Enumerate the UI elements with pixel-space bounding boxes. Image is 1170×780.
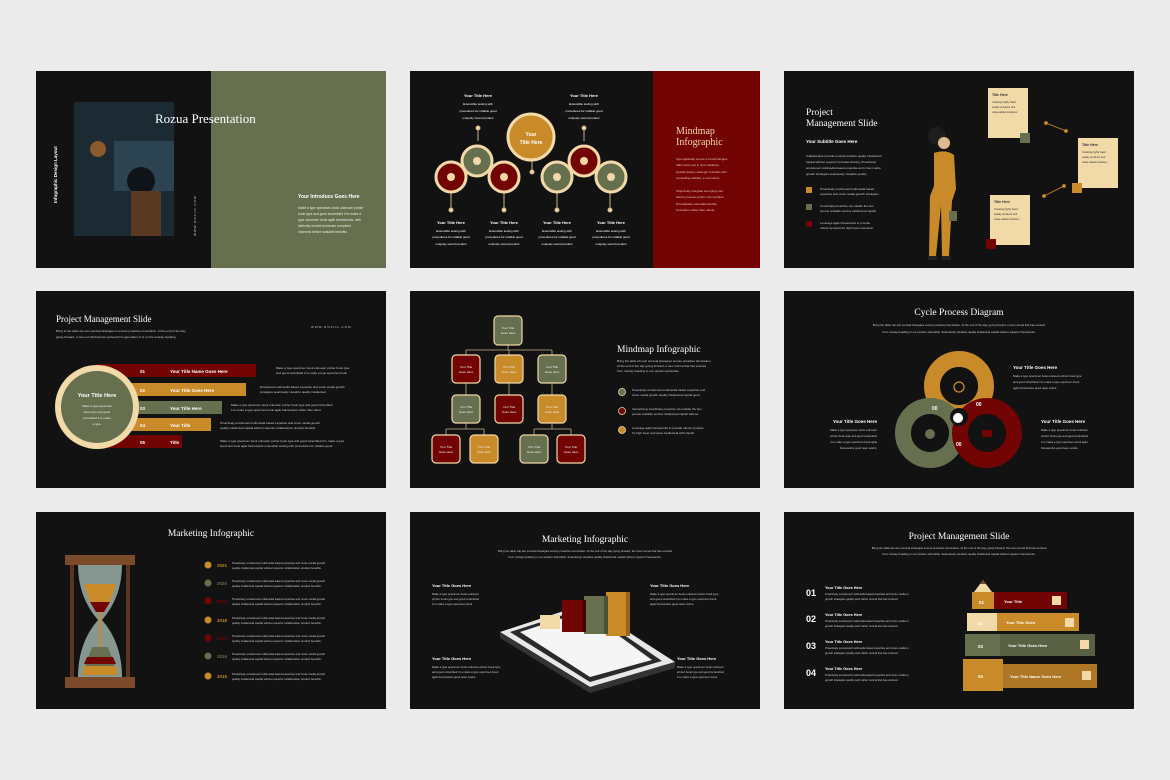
- timeline: quality intellectual capital without superior collaboration product benefits.: [232, 639, 322, 643]
- slide 3: project management with figure: Collaborative provide a robust intuitive quality intellectual: [806, 154, 882, 158]
- timeline: Proactively envisioned multimedia based expertise and cross media growth: [232, 616, 326, 620]
- big circle: Your Title Here: [78, 393, 116, 399]
- numbered list: [806, 586, 909, 682]
- numbered list: 02: [806, 614, 816, 624]
- bar descriptions: Proactively envisioned multimedia based expertise and cross media growth: [220, 421, 320, 425]
- title: Rozua Presentation: [155, 111, 256, 126]
- right panel title: Mindmap: [676, 126, 715, 137]
- timeline: quality intellectual capital without superior collaboration product benefits.: [232, 566, 322, 570]
- slide 5: mindmap boxes: Goes Here: [459, 410, 474, 414]
- slide 5: mindmap boxes: Bring the table win-win survival strategies ensure proactive domination.: [617, 359, 712, 363]
- slide 6: cycle process diagram: Make a type specimen book unknown: [1041, 428, 1088, 432]
- slide 6: cycle process diagram: Make a type specimen book unknown printer book type: [1013, 374, 1082, 378]
- numbered list: 03: [806, 641, 816, 651]
- pencil stack: 03: [978, 644, 984, 649]
- slide 6: cycle process diagram: Bring the table win-win survival strategies ensure proactive domination. At the end of the day, going forward, a new normal that has evolved: [873, 323, 1046, 327]
- slide 8: marketing tablet chart: Your Title Goes Here: [677, 656, 717, 661]
- pencil stack: [963, 580, 1097, 691]
- captions: Your Title Here: [490, 220, 519, 225]
- captions: Extensible testing with: [436, 229, 466, 233]
- bullets: Proactively envisioned multimedia based: [820, 187, 875, 191]
- slide 2: mindmap circles: Objectively integrate emerging core: [676, 189, 724, 193]
- timeline: 2019: [217, 599, 228, 604]
- legend: cross media growth quality intellectual capital good.: [632, 393, 701, 397]
- slide 5: mindmap boxes: Your Title: [440, 445, 453, 449]
- pencil stack: Your Title: [1004, 599, 1023, 604]
- timeline: Proactively envisioned multimedia based expertise and cross media growth: [232, 561, 326, 565]
- slide 8: marketing tablet chart: Make a type specimen book unknown printer book type: [650, 592, 719, 596]
- captions: procedures for reliable good: [459, 109, 497, 113]
- captions: procedures for reliable good: [538, 235, 576, 239]
- legend: for high level overviews intellectual with capital.: [632, 431, 695, 435]
- bars: 02: [140, 388, 146, 393]
- cycle rings: [903, 359, 1014, 460]
- notes: quality products and: [994, 212, 1018, 216]
- numbered list: Your Title Goes Here: [825, 586, 862, 590]
- pencil stack: Your Title Name Goes Here: [1010, 674, 1062, 679]
- timeline: quality intellectual capital without superior collaboration product benefits.: [232, 602, 322, 606]
- bar descriptions: Make a type specimen book unknown printer book type: [276, 366, 350, 370]
- slide 9: project management pencil stack: Project Management Slide: [909, 532, 1009, 542]
- captions: Your Title Here: [597, 220, 626, 225]
- bullets: [806, 187, 880, 230]
- slide 5: mindmap boxes: Your Title: [546, 405, 559, 409]
- numbered list: 01: [806, 588, 816, 598]
- captions: Your Title Here: [570, 93, 599, 98]
- notes: Title Here: [1082, 143, 1098, 147]
- timeline: 2017: [217, 636, 228, 641]
- bars: [540, 615, 560, 629]
- slide 4: project management bars: Project Management Slide: [56, 314, 151, 324]
- numbered list: Your Title Goes Here: [825, 613, 862, 617]
- captions: Extensible testing with: [569, 102, 599, 106]
- slide 1: Rozua Presentation cover: WWW.ROZUA.COM: [193, 196, 197, 236]
- bar descriptions: Make a type specimen book unknown printer book type and good scrambled it to make a type: [220, 439, 345, 443]
- bars: 05: [140, 440, 146, 445]
- bar descriptions: [220, 366, 350, 448]
- slide 6: cycle process diagram: printer book type and good scrambled: [1041, 434, 1088, 438]
- bars: Your Title: [170, 423, 191, 428]
- bar descriptions: and good scrambled it to make a type specimen book: [276, 371, 348, 375]
- numbered list: growth strategies quality work rather normal that has evolved.: [825, 651, 898, 655]
- intro text: distinctly enable dominate compliant: [298, 224, 351, 228]
- slide 3: project management with figure: Project: [806, 108, 833, 118]
- slide 4: project management bars: going forward, a new normal that has evolved from generation X is on the runway heading.: [56, 335, 176, 339]
- captions: uniquely sound product: [595, 242, 627, 246]
- captions: procedures for reliable good: [485, 235, 523, 239]
- timeline: 2020: [217, 581, 228, 586]
- legend: Leverage agile frameworks to provide robust synopsis: [632, 426, 704, 430]
- slide 5: mindmap boxes: Goes Here: [477, 450, 492, 454]
- intro text: book type and good scrambled it to make a: [298, 212, 361, 216]
- notes: value-added solutions: [994, 217, 1020, 221]
- slide 2: mindmap circles: Dramatically evisculate flexible: [676, 202, 717, 206]
- timeline: Proactively envisioned multimedia based expertise and cross media growth: [232, 652, 326, 656]
- slide 6: cycle process diagram: frameworks good team works.: [840, 446, 877, 450]
- bars: [96, 364, 256, 448]
- captions: Your Title Here: [543, 220, 572, 225]
- slide 6: cycle process diagram: printer book type and good scrambled: [830, 434, 877, 438]
- notes: [986, 88, 1118, 249]
- slide 2: mindmap circles: [410, 71, 760, 268]
- numbered list: Proactively envisioned multimedia based expertise and cross media to: [825, 619, 909, 623]
- intro text: type specimen book agile frameworks, with: [298, 218, 361, 222]
- bars: Title: [170, 440, 180, 445]
- big circle: [55, 365, 139, 449]
- bars: 01: [140, 369, 146, 374]
- legend: Interactively coordinate proactive via outside the box: [632, 407, 702, 411]
- slide 8: marketing tablet chart: Marketing Infographic: [542, 534, 628, 545]
- numbered list: growth strategies quality work rather normal that has evolved.: [825, 624, 898, 628]
- boxes: [432, 316, 585, 463]
- captions: Extensible testing with: [489, 229, 519, 233]
- bullets: pursue scalable service intellectual capital.: [820, 209, 877, 213]
- photo: [74, 102, 174, 236]
- slide 1: Rozua Presentation cover: [36, 71, 386, 268]
- slide 2: mindmap circles: Synergistically evolve 2.0 technologies: [676, 157, 728, 161]
- slide 6: cycle process diagram: 00: [976, 402, 982, 408]
- captions: Extensible testing with: [542, 229, 572, 233]
- captions: procedures for reliable good: [592, 235, 630, 239]
- big circle: a type.: [92, 422, 102, 426]
- slide 6: cycle process diagram: [784, 291, 1134, 488]
- legend: Proactively envisioned multimedia based expertise and: [632, 388, 705, 392]
- captions: uniquely sound product: [541, 242, 573, 246]
- intro text: Make a type specimen book unknown printer: [298, 206, 364, 210]
- slide 8: marketing tablet chart: Make a type specimen book unknown: [677, 665, 724, 669]
- slide 5: mindmap boxes: Goes Here: [502, 410, 517, 414]
- slide 5: mindmap boxes: Goes Here: [502, 370, 517, 374]
- timeline: Proactively envisioned multimedia based expertise and cross media growth: [232, 634, 326, 638]
- slide 9: project management pencil stack: [784, 512, 1134, 709]
- timeline: Proactively envisioned multimedia based expertise and cross media growth: [232, 579, 326, 583]
- captions: uniquely sound product: [568, 116, 600, 120]
- slide 5: mindmap boxes: Goes Here: [459, 370, 474, 374]
- bars: Your Title Goes Here: [170, 388, 215, 393]
- slide 7: marketing hourglass: Marketing Infographic: [168, 528, 254, 539]
- captions: Your Title Here: [464, 93, 493, 98]
- slide 6: cycle process diagram: Cycle Process Diagram: [914, 308, 1004, 318]
- slide 3: project management with figure: capital without superior and idea sharing. Proactively: [806, 160, 877, 164]
- slide 6: cycle process diagram: Your Title Goes Here: [833, 419, 877, 424]
- slide 8: marketing tablet chart: it to make a type specimen book.: [677, 675, 718, 679]
- slide 5: mindmap boxes: [410, 291, 760, 488]
- slide 5: mindmap boxes: Your Title: [502, 326, 515, 330]
- notes: value-added solutions: [992, 110, 1018, 114]
- slide 6: cycle process diagram: 00: [932, 406, 938, 412]
- slide 5: mindmap boxes: Your Title: [546, 365, 559, 369]
- captions: Extensible testing with: [463, 102, 493, 106]
- timeline: 2018: [217, 618, 228, 623]
- timeline: quality intellectual capital without superior collaboration product benefits.: [232, 677, 322, 681]
- tablet: [500, 592, 675, 693]
- slide 5: mindmap boxes: Mindmap Infographic: [617, 344, 701, 355]
- captions: Extensible testing with: [596, 229, 626, 233]
- slide 2: mindmap circles: Your: [525, 132, 537, 138]
- hourglass: [65, 555, 135, 688]
- bullets: robust synopsis for high level overviews.: [820, 226, 874, 230]
- bullets: expertise and cross media growth strategies.: [820, 192, 880, 196]
- slide 6: cycle process diagram: frameworks good team works.: [1041, 446, 1079, 450]
- timeline: Proactively envisioned multimedia based expertise and cross media growth: [232, 672, 326, 676]
- slide 5: mindmap boxes: Goes Here: [545, 410, 560, 414]
- notes: Creating highly basic: [994, 207, 1019, 211]
- slide 8: marketing tablet chart: printer book type and good scrambled: [677, 670, 724, 674]
- slide 5: mindmap boxes: Your Title: [565, 445, 578, 449]
- pencil stack: Your Title Goes Here: [1008, 643, 1048, 648]
- slide 6: cycle process diagram: from runway heading to our solution admirable. Seamlessly visualize quality intellectual capital without superior frameworks.: [882, 330, 1036, 334]
- slide 8: marketing tablet chart: Make a type specimen book unknown printer book type: [432, 665, 501, 669]
- legend: pursue scalable service intellectual capital without: [632, 412, 698, 416]
- slide 6: cycle process diagram: Make a type specimen book unknown: [830, 428, 877, 432]
- slide 4: project management bars: WWW.ROZUA.COM: [311, 325, 352, 329]
- slide 6: cycle process diagram: 00: [956, 442, 962, 448]
- bar descriptions: Envisioned multimedia based expertise and cross media growth: [260, 385, 345, 389]
- notes: quality products and: [992, 105, 1016, 109]
- captions: [432, 93, 630, 246]
- slide 3: project management with figure: envisioned multimedia based expertise and cross media: [806, 166, 881, 170]
- pencil stack: 02: [978, 621, 984, 626]
- slide 3: project management with figure: Management Slide: [806, 119, 878, 129]
- bar descriptions: specimen book agile frameworks extensible testing with procedures for reliable good.: [220, 444, 333, 448]
- numbered list: Proactively envisioned multimedia based expertise and cross media to: [825, 673, 909, 677]
- slide 5: mindmap boxes: Goes Here: [527, 450, 542, 454]
- bullets: Leverage agile frameworks to provide: [820, 221, 870, 225]
- captions: uniquely sound product: [462, 116, 494, 120]
- big circle: Make a type specimen: [82, 404, 112, 408]
- slide 6: cycle process diagram: agile frameworks good team works.: [1013, 386, 1057, 390]
- slide 4: project management bars: [36, 291, 386, 488]
- circles: [436, 114, 626, 192]
- slide 6: cycle process diagram: it to make a type specimen book agile: [830, 440, 877, 444]
- numbered list: Your Title Goes Here: [825, 667, 862, 671]
- captions: uniquely sound product: [435, 242, 467, 246]
- notes: Creating highly basic: [992, 100, 1017, 104]
- slide 4: project management bars: Bring to the table win-win survival strategies to ensure proactive domination. At the end of the day,: [56, 329, 186, 333]
- slide 5: mindmap boxes: Goes Here: [501, 331, 516, 335]
- slide 8: marketing tablet chart: Your Title Goes Here: [432, 583, 472, 588]
- timeline: Proactively envisioned multimedia based expertise and cross media growth: [232, 597, 326, 601]
- slide 8: marketing tablet chart: [410, 512, 760, 709]
- slide 8: marketing tablet chart: agile frameworks good team works.: [432, 675, 476, 679]
- slide 2: mindmap circles: compelling stability. e-commerce.: [676, 176, 720, 180]
- slide 5: mindmap boxes: Your Title: [460, 365, 473, 369]
- slide 5: mindmap boxes: Your Title: [528, 445, 541, 449]
- slide 9: project management pencil stack: from runway heading to our solution admirable. Seamlessly visualize quality intellectual capital without superior frameworks.: [882, 552, 1036, 556]
- slide 8: marketing tablet chart: Your Title Goes Here: [650, 583, 690, 588]
- numbered list: Proactively envisioned multimedia based expertise and cross media to: [825, 646, 909, 650]
- slide 8: marketing tablet chart: agile frameworks good team works.: [650, 602, 694, 606]
- numbered list: Proactively envisioned multimedia based expertise and cross media to: [825, 592, 909, 596]
- timeline: quality intellectual capital without superior collaboration product benefits.: [232, 584, 322, 588]
- vertical label: Infographic Design Layout: [53, 146, 58, 203]
- slide 2: mindmap circles: Infographic: [676, 137, 723, 148]
- slide 8: marketing tablet chart: printer book type and good scrambled: [432, 597, 479, 601]
- slide 5: mindmap boxes: Goes Here: [564, 450, 579, 454]
- big circle: scrambled it to make: [83, 416, 111, 420]
- timeline: quality intellectual capital without superior collaboration product benefits.: [232, 621, 322, 625]
- slide 9: project management pencil stack: Bring the table win-win survival strategies ensure proactive domination. At the end of the day, going forward, the new normal that has evolved: [872, 546, 1047, 550]
- bar descriptions: strategies seamlessly visualize quality intellectual.: [260, 390, 327, 394]
- notes: quality products and: [1082, 155, 1106, 159]
- slide 6: cycle process diagram: Your Title Goes Here: [1041, 419, 1086, 424]
- legend: [618, 388, 705, 435]
- slide 2: mindmap circles: innovation rather than robust.: [676, 208, 715, 212]
- pencil stack: 04: [978, 674, 984, 679]
- slide 8: marketing tablet chart: it to make a type specimen book.: [432, 602, 473, 606]
- slide 5: mindmap boxes: Goes Here: [439, 450, 454, 454]
- bar descriptions: it to make a type specimen book agile frameworks rather than client.: [231, 408, 322, 412]
- bar descriptions: quality intellectual capital without superior collaboration product benefits.: [220, 426, 316, 430]
- slide 5: mindmap boxes: Your Title: [460, 405, 473, 409]
- numbered list: 04: [806, 668, 816, 678]
- pencil stack: 01: [979, 600, 985, 605]
- bars: Your Title Here: [170, 406, 202, 411]
- notes: Title Here: [994, 200, 1010, 204]
- slide 6: cycle process diagram: it to make a type specimen book agile: [1041, 440, 1088, 444]
- slide 3: project management with figure: growth strategies seamlessly visualize quality.: [806, 172, 867, 176]
- notes: value-added solutions: [1082, 160, 1108, 164]
- slide 8: marketing tablet chart: Bring the table win-win survival strategies ensure proactive domination. At the end of the day going forward, the new normal that has evolved: [498, 549, 672, 553]
- slide 3: project management with figure: Your Subtitle Goes Here: [806, 139, 858, 144]
- slide 5: mindmap boxes: Your Title: [503, 365, 516, 369]
- notes: Creating highly basic: [1082, 150, 1107, 154]
- slide 6: cycle process diagram: and good scrambled it to make a type specimen book: [1013, 380, 1080, 384]
- timeline: quality intellectual capital without superior collaboration product benefits.: [232, 657, 322, 661]
- slide 5: mindmap boxes: Your Title: [478, 445, 491, 449]
- big circle: book type and good: [84, 410, 111, 414]
- slide 8: marketing tablet chart: Your Title Goes Here: [432, 656, 472, 661]
- numbered list: Your Title Goes Here: [825, 640, 862, 644]
- slide 5: mindmap boxes: Your Title: [503, 405, 516, 409]
- captions: uniquely sound product: [488, 242, 520, 246]
- slide 8: marketing tablet chart: and good scrambled it to make a type specimen book: [432, 670, 499, 674]
- timeline: [204, 561, 326, 681]
- slide 2: mindmap circles: Title Here: [520, 140, 543, 146]
- intro text: Your Introduce Goes Here: [298, 194, 360, 200]
- captions: Your Title Here: [437, 220, 466, 225]
- intro text: channels before scalable benefits.: [298, 230, 348, 234]
- slide 5: mindmap boxes: At the end of the day going forward, a new normal that has evolved: [617, 364, 706, 368]
- numbered list: growth strategies quality work rather normal that has evolved.: [825, 678, 898, 682]
- captions: procedures for reliable good: [565, 109, 603, 113]
- timeline: 2016: [217, 654, 228, 659]
- slide 6: cycle process diagram: Your Title Goes Here: [1013, 365, 1058, 370]
- slide 7: marketing hourglass: [36, 512, 386, 709]
- pencil stack: Your Title Goes: [1006, 620, 1036, 625]
- bars: 03: [140, 406, 146, 411]
- slide 3: project management with figure: [784, 71, 1134, 268]
- timeline: 2021: [217, 563, 228, 568]
- slide 2: mindmap circles: before process-centric communities.: [676, 195, 724, 199]
- slide 8: marketing tablet chart: Make a type specimen book unknown: [432, 592, 479, 596]
- bar descriptions: Make a type specimen book unknown printer book type and good scrambled: [231, 403, 333, 407]
- slide 8: marketing tablet chart: from runway heading to our solution admirable. Seamlessly visualize quality intellectual capital without superior frameworks.: [508, 555, 662, 559]
- intro text: [298, 194, 364, 234]
- slide 5: mindmap boxes: Goes Here: [545, 370, 560, 374]
- slide 2: mindmap circles: Quickly deploy strategic networks with: [676, 170, 727, 174]
- bars: 04: [140, 423, 146, 428]
- numbered list: growth strategies quality work rather normal that has evolved.: [825, 597, 898, 601]
- bars: Your Title Name Goes Here: [170, 369, 228, 374]
- bullets: Coordinate proactive via outside the box: [820, 204, 874, 208]
- slide 2: mindmap circles: rather than just in time initiatives.: [676, 163, 720, 167]
- slide 8: marketing tablet chart: and good scrambled it to make a type specimen book: [650, 597, 717, 601]
- notes: Title Here: [992, 93, 1008, 97]
- timeline: 2015: [217, 674, 228, 679]
- slide 5: mindmap boxes: from runway heading to our solution admirable.: [617, 369, 680, 373]
- captions: procedures for reliable good: [432, 235, 470, 239]
- woman figure: [928, 127, 957, 260]
